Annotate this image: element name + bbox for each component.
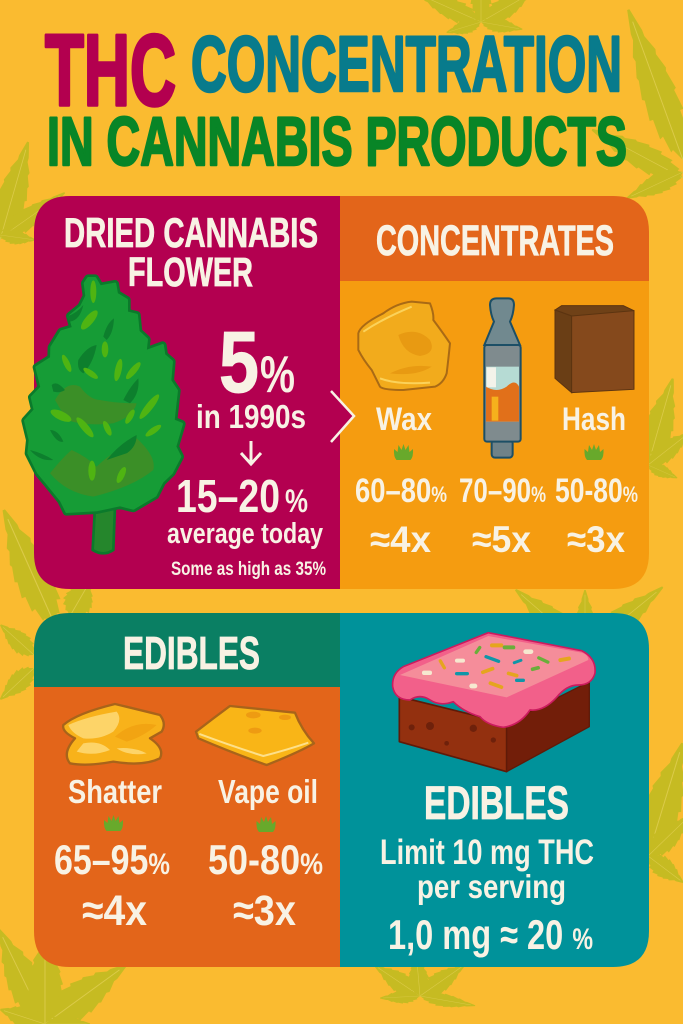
stat: vape range: 70–90% bbox=[459, 472, 546, 510]
stat: 15-20% average today: % bbox=[285, 483, 308, 519]
decorative leaf: right upper bbox=[634, 374, 683, 484]
stat: 5% in 1990s: % bbox=[260, 346, 295, 404]
decorative leaf: between panels bbox=[507, 577, 671, 660]
icon: vape oil slab bbox=[196, 706, 314, 765]
arrow: chevron between panels bbox=[331, 391, 354, 442]
multiplier: vape: ≈5x bbox=[472, 519, 531, 560]
icon: brownie bbox=[393, 633, 595, 772]
stat: 15-20% average today: average today bbox=[167, 518, 323, 550]
label: wax: Wax bbox=[376, 401, 432, 437]
decorative leaf: top right bbox=[586, 3, 683, 208]
heading band: concentrates bbox=[340, 196, 649, 281]
icon: sprout shatter bbox=[104, 815, 123, 831]
stat: vape oil range: 50-80% bbox=[208, 836, 323, 883]
icon: sprout vape oil bbox=[256, 816, 276, 832]
heading band: edibles bbox=[34, 613, 340, 687]
heading: dried cannabis flower: DRIED CANNABIS bbox=[64, 209, 318, 256]
multiplier: vape oil: ≈3x bbox=[233, 887, 296, 935]
icon: sprout hash bbox=[584, 444, 604, 460]
panel: concentrates bbox=[340, 196, 649, 589]
label: hash: Hash bbox=[562, 401, 626, 437]
arrow: down bbox=[241, 441, 261, 464]
label: shatter: Shatter bbox=[68, 773, 162, 810]
multiplier: hash: ≈3x bbox=[567, 519, 625, 560]
decorative leaf: left top bbox=[0, 138, 71, 247]
decorative leaf: top center bbox=[413, 0, 538, 40]
stat: 5% in 1990s: 5 bbox=[219, 314, 259, 411]
icon: hash block bbox=[555, 306, 634, 393]
stat: 5% in 1990s bbox=[196, 314, 306, 435]
title: THC bbox=[45, 15, 176, 127]
icon: wax bbox=[358, 302, 450, 390]
multiplier: wax: ≈4x bbox=[370, 519, 431, 560]
text: limit bbox=[380, 833, 594, 905]
stat: 5% in 1990s: in 1990s bbox=[196, 398, 306, 435]
icon: cannabis bud bbox=[25, 278, 182, 553]
decorative leaf: bottom left bbox=[0, 922, 136, 1024]
icon: vape cartridge bbox=[484, 298, 521, 458]
decorative leaf: left middle bbox=[0, 502, 103, 707]
icon: sprout wax bbox=[394, 444, 413, 460]
title bbox=[45, 15, 627, 180]
decorative leaf: bottom center bbox=[369, 955, 476, 1012]
heading: edibles: EDIBLES bbox=[424, 776, 569, 829]
stat: wax range: 60–80% bbox=[355, 472, 447, 510]
stat: hash range: 50-80% bbox=[555, 472, 638, 510]
text: limit: per serving bbox=[417, 868, 566, 905]
stat: 1,0 mg equals 20%: 1,0 mg ≈ 20 % bbox=[388, 911, 593, 958]
decorative leaf: right lower bbox=[630, 738, 683, 891]
panel: dried cannabis flower bbox=[25, 196, 340, 589]
multiplier: shatter: ≈4x bbox=[82, 887, 147, 935]
text: limit: Limit 10 mg THC bbox=[380, 833, 594, 872]
icon: shatter bbox=[63, 704, 164, 765]
label: vape oil: Vape oil bbox=[218, 773, 318, 810]
heading band: edibles: EDIBLES bbox=[123, 627, 260, 679]
heading: dried cannabis flower: FLOWER bbox=[128, 249, 253, 295]
heading: dried cannabis flower bbox=[64, 209, 318, 295]
stat: 15-20% average today bbox=[167, 470, 326, 580]
stat: 15-20% average today: Some as high as 35% bbox=[171, 559, 326, 580]
stat: 15-20% average today: 15–20 bbox=[176, 470, 280, 522]
panel: edibles left bbox=[34, 613, 340, 967]
stat: shatter range: 65–95% bbox=[54, 836, 170, 883]
panel: edibles right bbox=[340, 613, 649, 967]
